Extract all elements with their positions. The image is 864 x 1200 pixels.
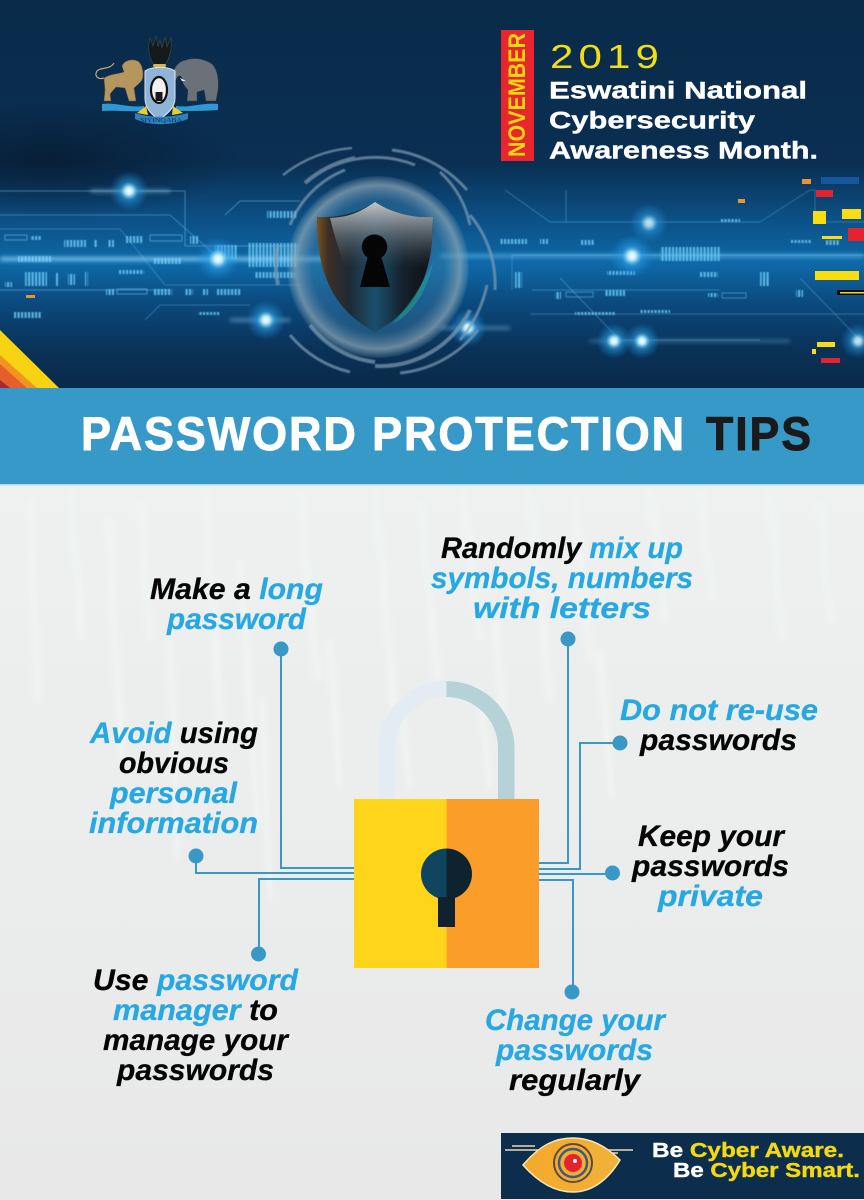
november label: NOVEMBER <box>504 33 531 157</box>
shield with glass rings <box>276 148 495 373</box>
tip: do not re-use: passwords <box>639 724 797 757</box>
shield body <box>317 202 433 332</box>
glowing lights <box>109 171 864 359</box>
shackle <box>378 681 446 799</box>
header title text: Cybersecurity <box>549 108 756 134</box>
tip: keep passwords private: private <box>657 880 763 913</box>
heading band <box>0 388 864 484</box>
tip: do not re-use <box>620 694 818 757</box>
feathers <box>149 36 171 65</box>
tip: avoid personal information: Avoid using <box>89 717 258 750</box>
slogan text <box>652 1140 860 1182</box>
header title text: 2019 <box>550 38 664 75</box>
keyhole <box>421 848 446 900</box>
tip: change passwords regularly <box>485 1004 667 1097</box>
tip: do not re-use: Do not re-use <box>620 694 818 727</box>
heading text: PASSWORD PROTECTION <box>81 407 686 460</box>
inner oval <box>151 77 167 103</box>
heading accent: TIPS <box>706 407 813 460</box>
keyhole <box>360 234 390 287</box>
tip: avoid personal information: information <box>89 807 258 840</box>
tip: keep passwords private: passwords <box>631 850 789 883</box>
tip: change passwords regularly: Change your <box>485 1004 667 1037</box>
slogan text: Be Cyber Smart. <box>673 1160 860 1182</box>
tip: use password manager: manage your <box>103 1024 290 1057</box>
motto scroll: SIYINQABA <box>140 118 183 124</box>
yellow ribbon tips <box>137 106 183 115</box>
tip: change passwords regularly: regularly <box>509 1064 641 1097</box>
tip: keep passwords private <box>631 820 789 913</box>
header title text <box>549 38 818 164</box>
tip: use password manager: Use password <box>93 964 299 997</box>
lock body <box>354 799 446 968</box>
padlock icon <box>354 681 539 968</box>
connector wires <box>196 639 620 992</box>
colour data blocks <box>26 177 864 363</box>
tip: avoid personal information <box>89 717 258 840</box>
circuit board pattern <box>0 190 864 340</box>
tip: avoid personal information: obvious <box>119 747 229 780</box>
header banner <box>0 0 864 388</box>
slogan text: Be Cyber Aware. <box>652 1140 844 1162</box>
tip: randomly mix up <box>431 532 693 625</box>
tip: randomly mix up: symbols, numbers <box>431 562 693 595</box>
tip: make a long password <box>150 573 323 636</box>
tip: use password manager: passwords <box>116 1054 274 1087</box>
footer slogan banner <box>501 1133 864 1199</box>
light streak <box>0 190 864 342</box>
tip: keep passwords private: Keep your <box>638 820 786 853</box>
tip: change passwords regularly: passwords <box>495 1034 653 1067</box>
tip: make a long password: password <box>166 603 307 636</box>
shield green edge <box>392 262 433 324</box>
crown <box>153 64 166 67</box>
shield <box>145 67 175 120</box>
shield highlight <box>330 202 433 268</box>
tip: randomly mix up: Randomly mix up <box>441 532 683 565</box>
connector dots <box>188 632 628 1000</box>
coat of arms <box>96 36 218 124</box>
header title text: Eswatini National <box>549 78 807 104</box>
ground ribbon <box>102 104 218 111</box>
tip: use password manager <box>93 964 299 1087</box>
tip: randomly mix up: with letters <box>473 592 651 625</box>
corner stripes <box>0 330 59 388</box>
header title text: Awareness Month. <box>549 138 818 164</box>
lion <box>96 60 143 101</box>
page background with data streaks <box>0 484 864 1200</box>
elephant <box>172 59 218 101</box>
tip: avoid personal information: personal <box>109 777 238 810</box>
tip: make a long password: Make a long <box>150 573 323 606</box>
icon: cyber eye <box>505 1138 633 1192</box>
tip: use password manager: manager to <box>113 994 278 1027</box>
